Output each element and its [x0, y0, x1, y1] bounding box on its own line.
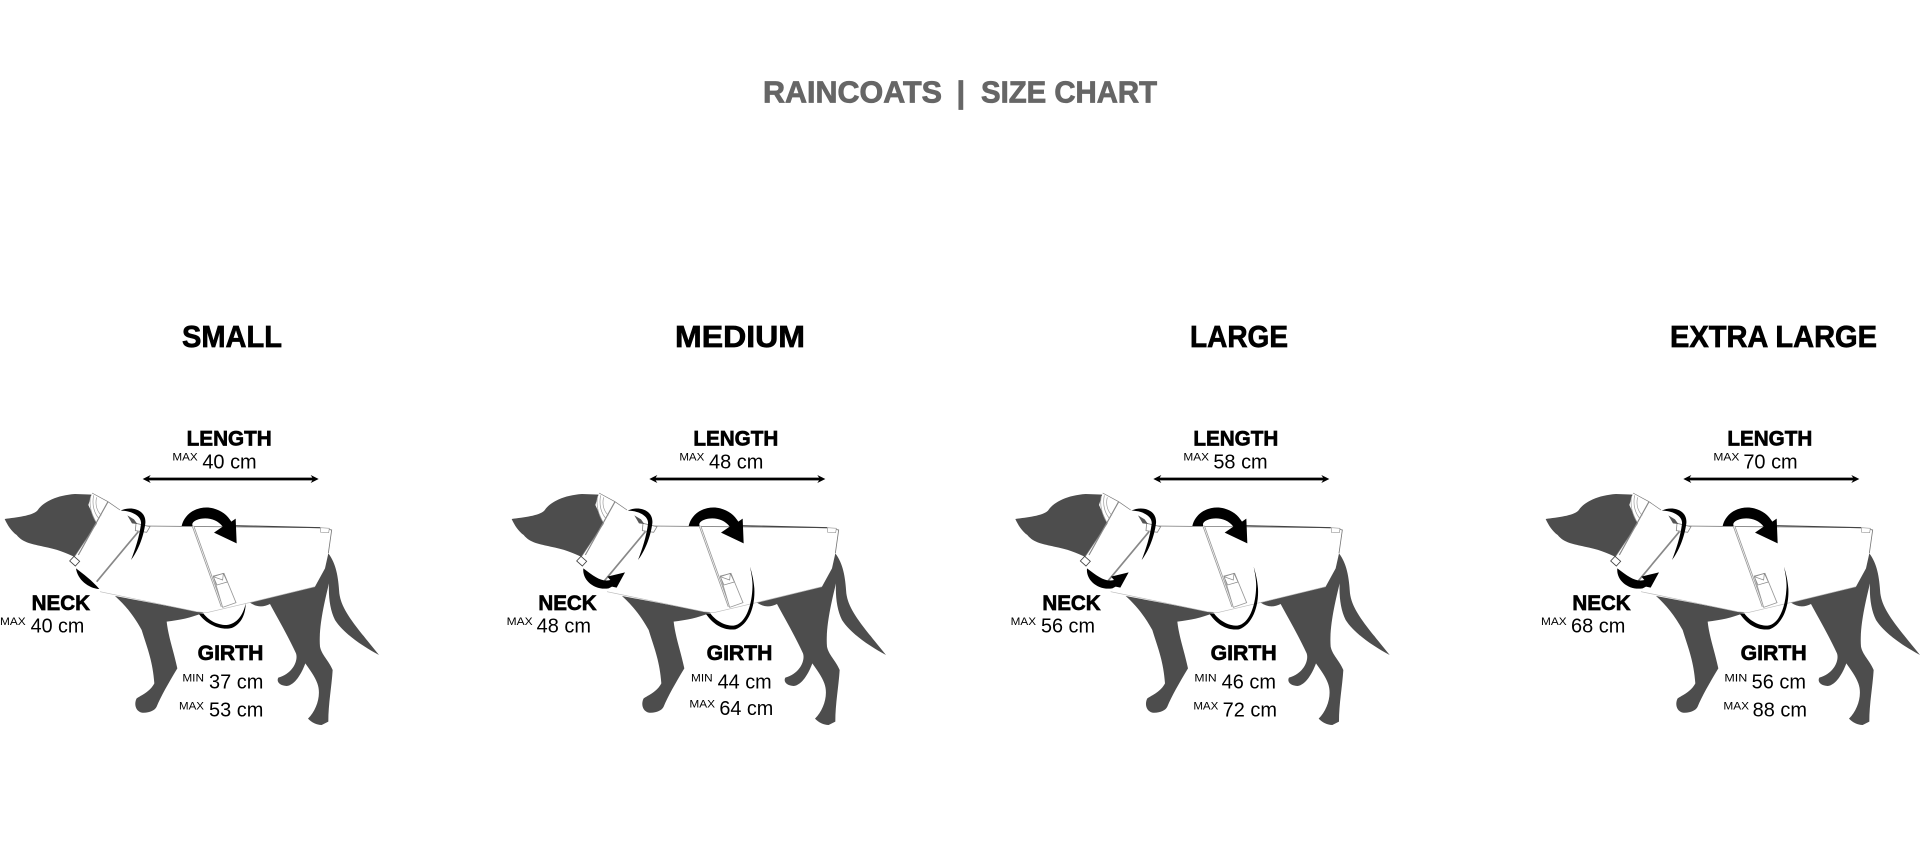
length max: medium: 48 cm: [709, 450, 763, 473]
girth min: small: [182, 670, 263, 693]
girth max: large: [1193, 699, 1277, 722]
length max: medium: MAX: [679, 452, 704, 464]
neck max: large: 56 cm: [1041, 615, 1095, 638]
length max: extra large: MAX: [1713, 452, 1739, 464]
girth label: medium: GIRTH: [707, 641, 772, 665]
length max: small: 40 cm: [202, 450, 257, 473]
length max: large: [1183, 450, 1268, 473]
heading: extra large: EXTRA LARGE: [1670, 319, 1877, 354]
girth label: small: GIRTH: [198, 641, 263, 665]
girth max: medium: 64 cm: [719, 697, 773, 720]
girth min: small: 37 cm: [209, 670, 263, 693]
girth max: extra large: MAX: [1723, 700, 1749, 712]
girth min: medium: 44 cm: [718, 670, 772, 693]
girth min: medium: MIN: [691, 673, 713, 685]
neck arrow: extra large: [1617, 568, 1659, 589]
length max: small: MAX: [172, 452, 198, 464]
girth min: medium: [691, 670, 772, 693]
girth max: extra large: [1723, 699, 1807, 722]
girth arc: large: [1210, 567, 1258, 630]
dog in raincoat: extra large: [1546, 493, 1920, 725]
neck max: medium: 48 cm: [537, 615, 591, 638]
girth max: large: 72 cm: [1223, 699, 1277, 722]
length label: medium: LENGTH: [693, 426, 778, 450]
neck max: medium: MAX: [507, 616, 533, 628]
length max: medium: [679, 450, 763, 473]
girth min: extra large: [1724, 670, 1806, 693]
neck max: small: MAX: [0, 616, 26, 628]
girth max: large: MAX: [1193, 700, 1218, 712]
girth arc: small: [199, 603, 246, 629]
girth min: large: [1194, 670, 1276, 693]
girth max: medium: MAX: [689, 698, 715, 710]
neck label: large: NECK: [1042, 591, 1101, 615]
length max: small: [172, 450, 257, 473]
girth min: small: MIN: [182, 673, 204, 685]
dog in raincoat: small: [5, 493, 379, 725]
girth min: large: 46 cm: [1222, 670, 1276, 693]
neck max: small: 40 cm: [31, 615, 84, 638]
heading: small: SMALL: [182, 319, 282, 354]
neck max: large: [1011, 615, 1095, 638]
dog in raincoat: large: [1015, 493, 1390, 725]
length label: extra large: LENGTH: [1727, 426, 1812, 450]
girth min: extra large: MIN: [1724, 673, 1747, 685]
panel: large: [1011, 426, 1390, 725]
neck max: large: MAX: [1011, 616, 1036, 628]
length max: extra large: [1713, 450, 1798, 473]
girth max: medium: [689, 697, 773, 720]
length arrow: small: [143, 475, 319, 483]
neck label: small: NECK: [32, 591, 91, 615]
length label: small: LENGTH: [187, 426, 272, 450]
heading: medium: MEDIUM: [675, 319, 805, 354]
neck arrow: medium: [583, 568, 625, 589]
panel: medium: [507, 426, 886, 725]
girth max: extra large: 88 cm: [1753, 699, 1807, 722]
neck max: medium: [507, 615, 591, 638]
neck label: medium: NECK: [538, 591, 597, 615]
title: RAINCOATS: [763, 74, 942, 110]
neck label: extra large: NECK: [1572, 591, 1631, 615]
title: [763, 74, 1157, 110]
girth label: large: GIRTH: [1211, 641, 1277, 665]
dog in raincoat: medium: [512, 493, 886, 725]
neck arrow: large: [1087, 568, 1129, 589]
length max: large: MAX: [1183, 452, 1209, 464]
panel: small: [0, 426, 379, 725]
length max: large: 58 cm: [1213, 450, 1268, 473]
girth min: large: MIN: [1194, 673, 1217, 685]
title: SIZE CHART: [981, 74, 1157, 110]
girth arc: medium: [706, 567, 754, 630]
heading: large: LARGE: [1190, 319, 1288, 354]
neck arc: small: [76, 568, 99, 589]
neck max: small: [0, 615, 84, 638]
panel: extra large: [1541, 426, 1920, 725]
girth min: extra large: 56 cm: [1752, 670, 1806, 693]
girth label: extra large: GIRTH: [1741, 641, 1807, 665]
girth arc: extra large: [1740, 567, 1788, 630]
title: |: [956, 74, 965, 110]
girth max: small: 53 cm: [209, 699, 263, 722]
neck max: extra large: 68 cm: [1571, 615, 1625, 638]
neck max: extra large: MAX: [1541, 616, 1567, 628]
neck max: extra large: [1541, 615, 1625, 638]
girth max: small: MAX: [179, 700, 204, 712]
girth max: small: [179, 699, 263, 722]
length arrow: extra large: [1683, 475, 1859, 483]
length arrow: large: [1153, 475, 1329, 483]
length label: large: LENGTH: [1193, 426, 1278, 450]
length max: extra large: 70 cm: [1743, 450, 1798, 473]
length arrow: medium: [649, 475, 825, 483]
